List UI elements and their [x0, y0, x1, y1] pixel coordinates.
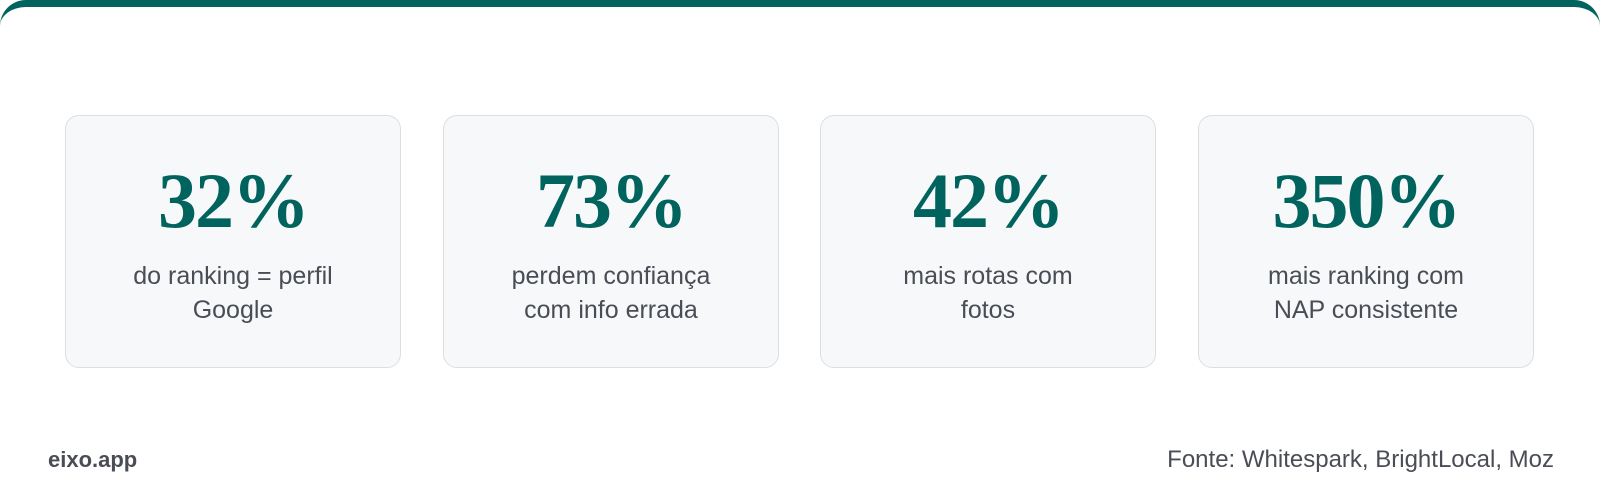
card: 73%: com info errada: [524, 296, 698, 324]
card: 73%: perdem confiança: [512, 262, 710, 290]
card: 350%: mais ranking com: [1268, 262, 1464, 290]
card: 32%: do ranking = perfil: [133, 262, 333, 290]
card: 73%: 73%: [536, 157, 686, 244]
card: 42%: fotos: [961, 296, 1015, 324]
footer source: Fonte: Whitespark, BrightLocal, Moz: [1167, 446, 1554, 473]
card: 350%: NAP consistente: [1274, 296, 1458, 324]
card: 32%: [65, 115, 401, 368]
card: 32%: 32%: [158, 157, 308, 244]
card: 42%: mais rotas com: [903, 262, 1073, 290]
card: 350%: [1198, 115, 1534, 368]
card: 350%: 350%: [1272, 157, 1460, 244]
card: 42%: 42%: [913, 157, 1063, 244]
card: 42%: [820, 115, 1156, 368]
card: 32%: Google: [193, 296, 273, 324]
card: 73%: [443, 115, 779, 368]
footer brand: eixo.app: [48, 447, 137, 472]
